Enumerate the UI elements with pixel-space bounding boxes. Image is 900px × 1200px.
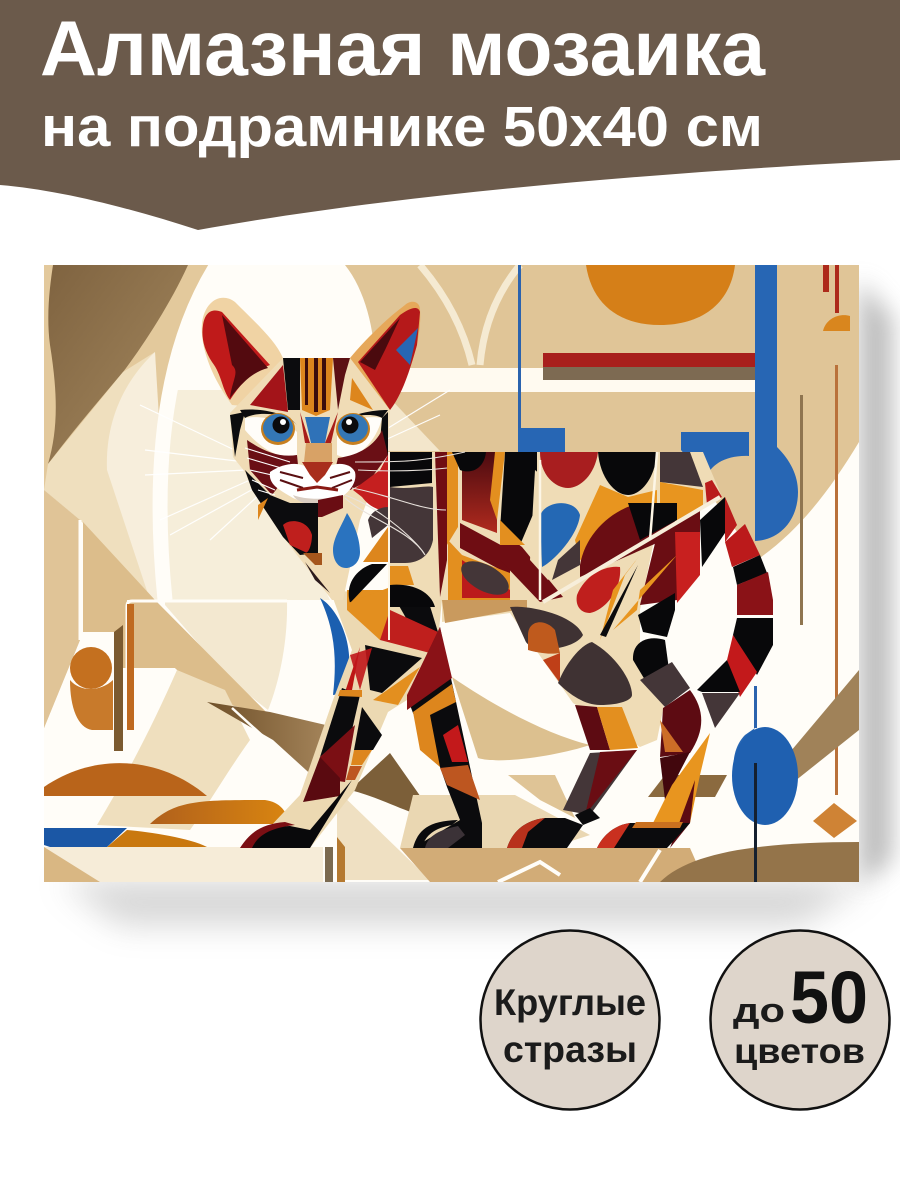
header banner xyxy=(0,0,900,230)
badge: up to 50 colors: цветов xyxy=(734,1032,865,1071)
neck and chest xyxy=(245,470,318,555)
front right leg xyxy=(407,627,482,848)
ears xyxy=(202,298,420,410)
badge: up to 50 colors: до xyxy=(733,992,785,1030)
body whiskers xyxy=(345,452,465,555)
top left brown and tan xyxy=(44,265,217,520)
face xyxy=(230,358,390,600)
bottom cream and tan xyxy=(44,847,323,882)
muzzle xyxy=(270,464,355,502)
paws xyxy=(507,818,583,848)
top right tan field xyxy=(345,265,859,560)
abstract background xyxy=(44,265,859,882)
badge: up to 50 colors: 50 xyxy=(790,956,868,1039)
tan triangle xyxy=(44,490,80,728)
badge: up to 50 colors xyxy=(710,930,890,1110)
badge: round rhinestones: Круглые xyxy=(494,982,646,1023)
sand shapes xyxy=(452,677,590,760)
subtitle: на подрамнике 50х40 см xyxy=(41,95,763,159)
badge: round rhinestones: стразы xyxy=(503,1029,637,1070)
cat eyes xyxy=(261,413,370,445)
front shoulder xyxy=(272,590,442,848)
whiskers xyxy=(140,390,450,540)
cat head xyxy=(140,298,465,640)
tail xyxy=(675,497,773,728)
forehead blue mark xyxy=(305,417,330,443)
canvas shadow xyxy=(60,280,892,925)
torso xyxy=(388,452,722,747)
under belly ledge xyxy=(442,600,527,623)
front left leg xyxy=(240,688,382,848)
cream diagonal band xyxy=(97,670,250,830)
cheeks xyxy=(247,440,298,495)
badge: round rhinestones xyxy=(480,930,660,1110)
hind legs xyxy=(507,607,710,848)
cat xyxy=(140,298,773,848)
title: Алмазная мозаика xyxy=(40,4,766,92)
brown swoosh xyxy=(207,702,324,772)
canvas painting xyxy=(44,265,859,882)
orange domes xyxy=(44,763,207,796)
